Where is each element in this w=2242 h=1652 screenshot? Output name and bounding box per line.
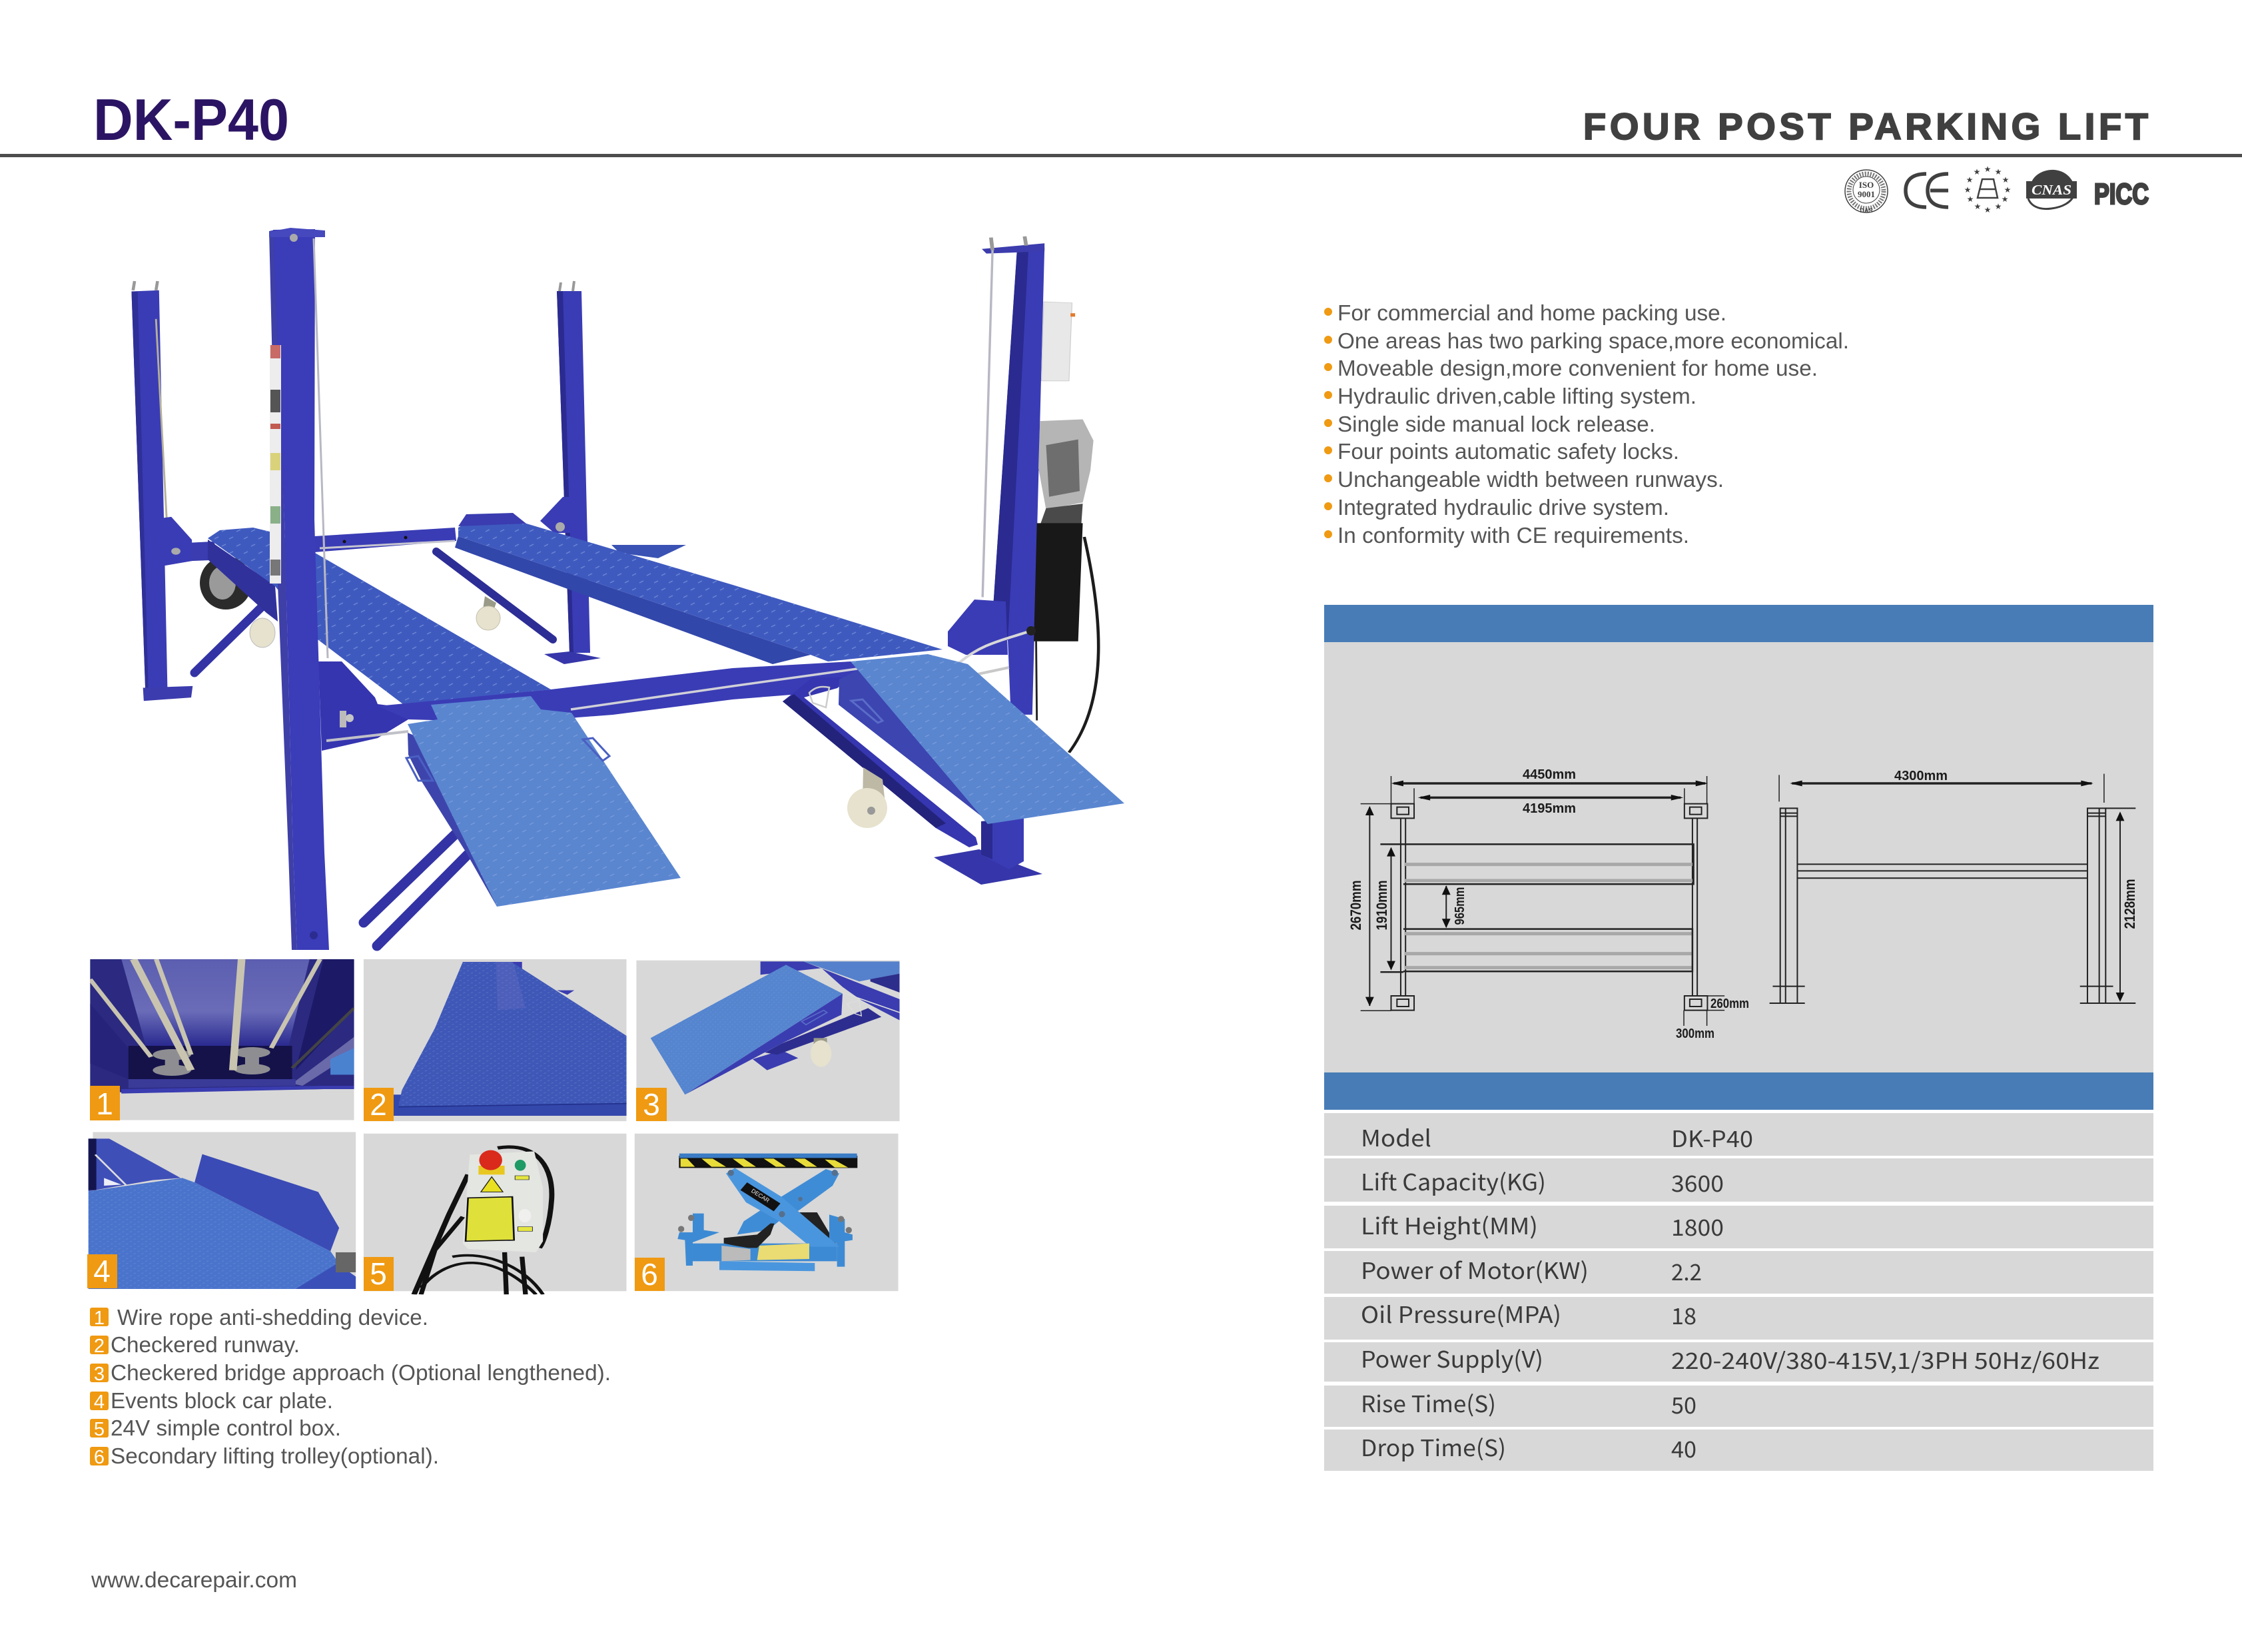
row: motor power (1324, 1251, 2153, 1294)
legend item 6: Secondary lifting trolley(optional). (111, 1444, 439, 1468)
feature bullet list (1324, 300, 1849, 548)
badge 3 (636, 1087, 667, 1122)
icon: star ring mark: ★ (1984, 205, 1991, 214)
legend item 2: Checkered runway. (111, 1332, 300, 1357)
carriage bracket (948, 600, 1008, 655)
bullet text lines: For commercial and home packing use. (1337, 300, 1726, 325)
row: power supply: Power Supply(V) (1361, 1342, 1543, 1374)
lower left legs (364, 831, 468, 946)
bullet text lines: Hydraulic driven,cable lifting system. (1337, 384, 1696, 408)
dimension labels: 300mm (1676, 1027, 1714, 1041)
legend item 5: 24V simple control box. (111, 1416, 341, 1440)
row: model (1324, 1113, 2153, 1156)
icon: CE mark (1906, 174, 1948, 207)
right support leg and caster (783, 677, 978, 847)
detail photo 6: lifting trolley (635, 1134, 899, 1291)
front ramp right (839, 654, 1124, 824)
row: rise time (1324, 1386, 2153, 1427)
front left post (269, 228, 329, 950)
legend item 4: 4 (94, 1392, 105, 1413)
certification logos (1845, 165, 2149, 214)
icon: ISO 9001: DAS (1860, 207, 1873, 214)
badge 4: 4 (93, 1254, 111, 1288)
legend item 2: 2 (94, 1336, 105, 1357)
badge 2: 2 (370, 1087, 387, 1122)
dimension labels (1347, 767, 2138, 1041)
row: lift capacity: Lift Capacity(KG) (1361, 1164, 1546, 1197)
motor (1038, 420, 1094, 510)
badge 4 (87, 1254, 117, 1288)
badge 1: 1 (96, 1086, 113, 1121)
detail photo 2: checkered runway (364, 959, 627, 1121)
panel: dimension drawing (1324, 605, 2153, 1110)
badge 6 (635, 1257, 665, 1292)
row: rise time: Rise Time(S) (1361, 1386, 1496, 1419)
icon: star ring mark: ★ (1974, 167, 1980, 177)
lower post stub and base plate (934, 849, 1042, 885)
back crossbeam (314, 528, 456, 552)
right runway (455, 513, 942, 664)
icon: star ring mark: ★ (1984, 165, 1991, 174)
icon: star ring mark (1964, 165, 2011, 214)
bullet text lines: One areas has two parking space,more economical. (1337, 328, 1849, 353)
arrowheads (1790, 781, 2124, 1002)
badge 2 (364, 1087, 394, 1122)
icon: star ring mark: ★ (2002, 175, 2009, 185)
header rule (0, 154, 2242, 157)
dimension labels: 965mm (1453, 887, 1467, 925)
left runway (208, 528, 551, 751)
front crossbeam (378, 661, 861, 723)
icon: ISO 9001: 9001 (1858, 189, 1875, 199)
dimension labels: 2128mm (2121, 879, 2138, 929)
model title: DK-P40 (93, 87, 289, 153)
product heading: FOUR POST PARKING LIFT (1583, 105, 2148, 147)
back right post (540, 281, 601, 664)
bullet text lines: Moveable design,more convenient for home use. (1337, 356, 1818, 380)
icon: ISO 9001 (1845, 170, 1888, 214)
badge 5 (364, 1256, 394, 1291)
row: drop time: Drop Time(S) (1361, 1430, 1506, 1463)
bullet text lines: Integrated hydraulic drive system. (1337, 495, 1669, 520)
bullet text lines: Four points automatic safety locks. (1337, 439, 1679, 464)
icon: star ring mark: ★ (1967, 195, 1974, 204)
icon: star ring mark: ★ (1964, 185, 1971, 195)
detail photo 5: control box (364, 1134, 627, 1294)
numbered feature legend (90, 1305, 611, 1468)
icon: star ring mark: ★ (2004, 185, 2011, 195)
icon: star ring mark: ★ (2002, 195, 2008, 204)
row: lift height: 1800 (1671, 1210, 1724, 1242)
icon: ISO 9001: ISO (1859, 180, 1874, 190)
top blue band (1324, 605, 2153, 642)
control box (1042, 302, 1072, 381)
badge 3: 3 (643, 1087, 660, 1122)
dimension labels: 2670mm (1347, 881, 1364, 930)
dimension labels: 1910mm (1373, 881, 1390, 930)
arrowheads (1365, 781, 1708, 1007)
icon: CNAS: CNAS (2032, 182, 2071, 198)
icon: star ring mark: ★ (1995, 167, 2002, 177)
badge 6: 6 (641, 1257, 658, 1292)
icon: PICC: PICC (2094, 178, 2149, 210)
row: lift capacity (1324, 1158, 2153, 1202)
legend item 1: Wire rope anti-shedding device. (117, 1305, 428, 1330)
badge 5: 5 (370, 1256, 387, 1291)
row: drop time: 40 (1671, 1432, 1696, 1464)
handle rod (959, 631, 1029, 663)
icon: CNAS (2026, 170, 2077, 209)
legend item 4: Events block car plate. (111, 1388, 333, 1413)
dimension labels: 4300mm (1894, 769, 1948, 783)
detail photo 1: wire rope (90, 959, 354, 1120)
row: lift height: Lift Height(MM) (1361, 1208, 1538, 1241)
dimension labels: 260mm (1710, 997, 1749, 1011)
icon: star ring mark: ★ (1995, 202, 2002, 211)
row: oil pressure: 18 (1671, 1298, 1696, 1331)
row: power supply: 220-240V/380-415V,1/3PH 50Hz/60Hz (1671, 1343, 2099, 1376)
back left post (131, 281, 218, 701)
row: motor power: Power of Motor(KW) (1361, 1253, 1589, 1286)
bullet text lines: Single side manual lock release. (1337, 412, 1655, 436)
detail photo 4: car block plate (89, 1132, 356, 1289)
row: model: Model (1361, 1120, 1431, 1153)
main product photo: four post lift (131, 228, 1124, 950)
bullet text lines: Unchangeable width between runways. (1337, 467, 1724, 492)
legend item 5: 5 (94, 1419, 105, 1440)
bottom blue band (1324, 1072, 2153, 1110)
row: lift height (1324, 1206, 2153, 1248)
icon: star ring mark: ★ (1966, 175, 1973, 185)
website url: www.decarepair.com (91, 1567, 297, 1592)
row: oil pressure (1324, 1297, 2153, 1340)
oil tank (1034, 523, 1083, 641)
icon: star ring mark: ★ (1974, 202, 1981, 211)
detail photo 3: bridge approach (636, 961, 900, 1121)
row: rise time: 50 (1671, 1388, 1696, 1420)
badge 1 (90, 1086, 120, 1121)
row: model: DK-P40 (1671, 1121, 1753, 1154)
front ramp left (406, 696, 681, 907)
legend item 3: Checkered bridge approach (Optional lengthened). (111, 1360, 611, 1385)
row: motor power: 2.2 (1671, 1254, 1702, 1287)
legend item 1: 1 (94, 1308, 105, 1329)
bullet text lines (1337, 300, 1849, 548)
row: oil pressure: Oil Pressure(MPA) (1361, 1297, 1561, 1330)
safety label strip (270, 345, 281, 584)
right front post with power unit (934, 236, 1098, 885)
row: power supply (1324, 1342, 2153, 1382)
bullet text lines: In conformity with CE requirements. (1337, 523, 1689, 548)
plan view drawing (1361, 776, 1724, 1026)
detail photo 6: lifting trolley: DECAR (750, 1187, 771, 1204)
specification table (1324, 1113, 2153, 1471)
wheel and back legs (194, 545, 686, 673)
dimension labels: 4450mm (1523, 767, 1576, 782)
legend item 6: 6 (94, 1447, 105, 1468)
row: lift capacity: 3600 (1671, 1166, 1724, 1198)
row: drop time (1324, 1430, 2153, 1471)
legend item 3: 3 (94, 1364, 105, 1385)
dimension labels: 4195mm (1523, 801, 1576, 816)
bullet markers (1324, 308, 1332, 538)
side view drawing (1770, 774, 2135, 1003)
